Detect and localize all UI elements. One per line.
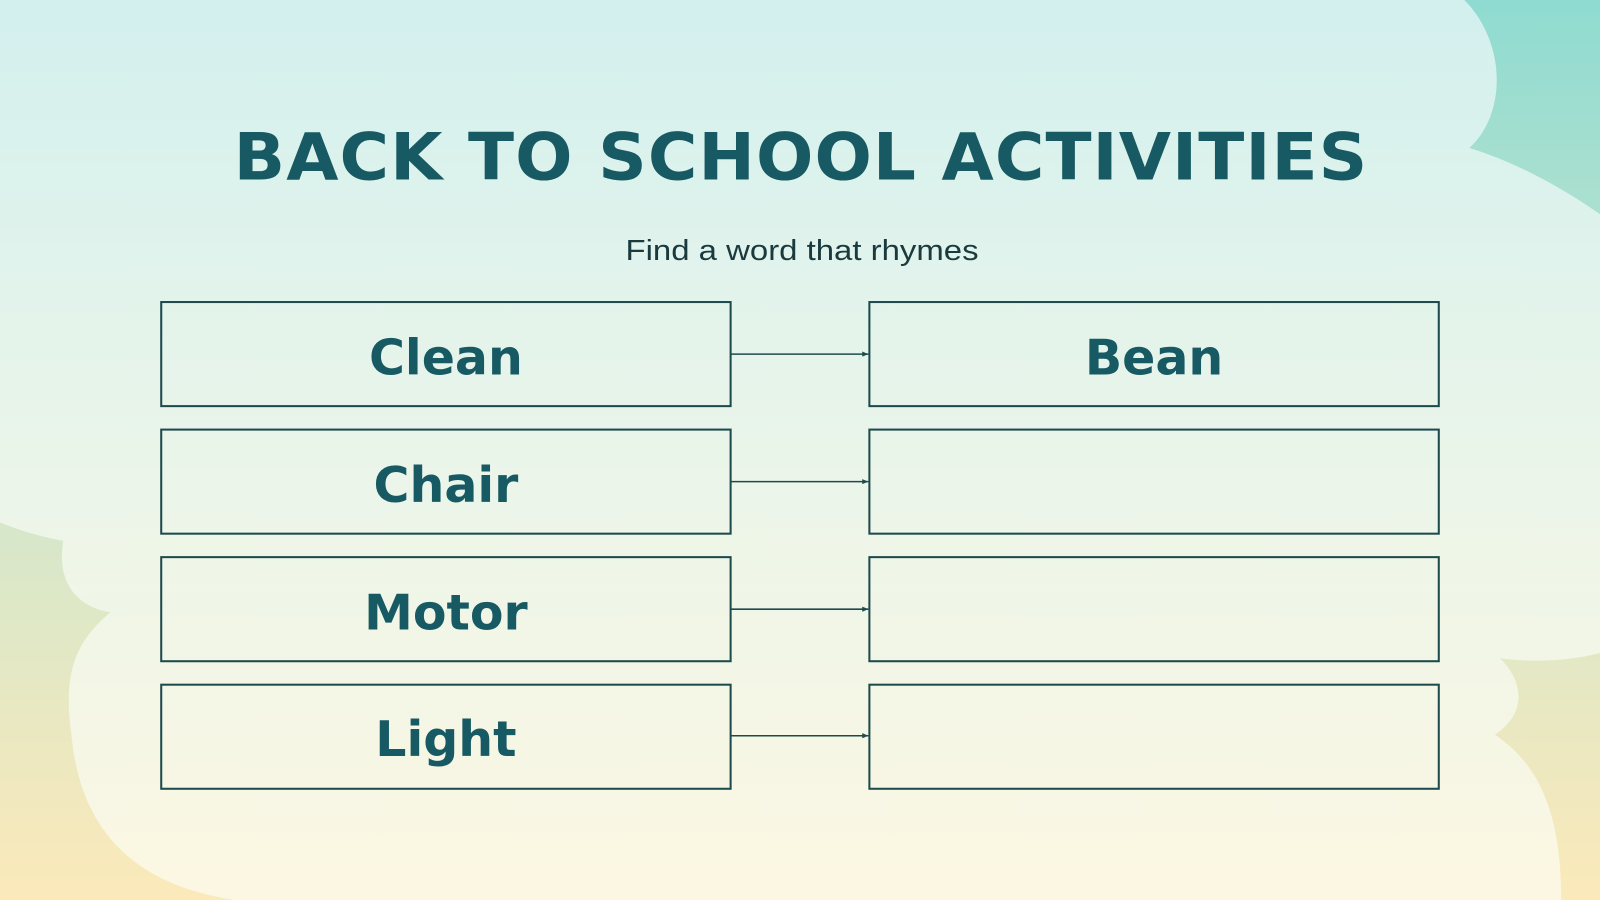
row 3 <box>161 557 1439 661</box>
title: BACK TO SCHOOL ACTIVITIES <box>234 120 1368 196</box>
word: Clean: Clean <box>369 329 523 386</box>
word: Bean: Bean <box>1085 329 1223 386</box>
rows of rhyme boxes <box>161 302 1439 789</box>
word: Motor: Motor <box>364 585 528 642</box>
row 2 <box>161 430 1439 534</box>
subtitle: Find a word that rhymes <box>626 235 979 267</box>
row 4 <box>161 685 1439 789</box>
word: Light: Light <box>375 711 517 768</box>
word: Chair: Chair <box>374 457 518 514</box>
row 1 <box>161 302 1439 406</box>
